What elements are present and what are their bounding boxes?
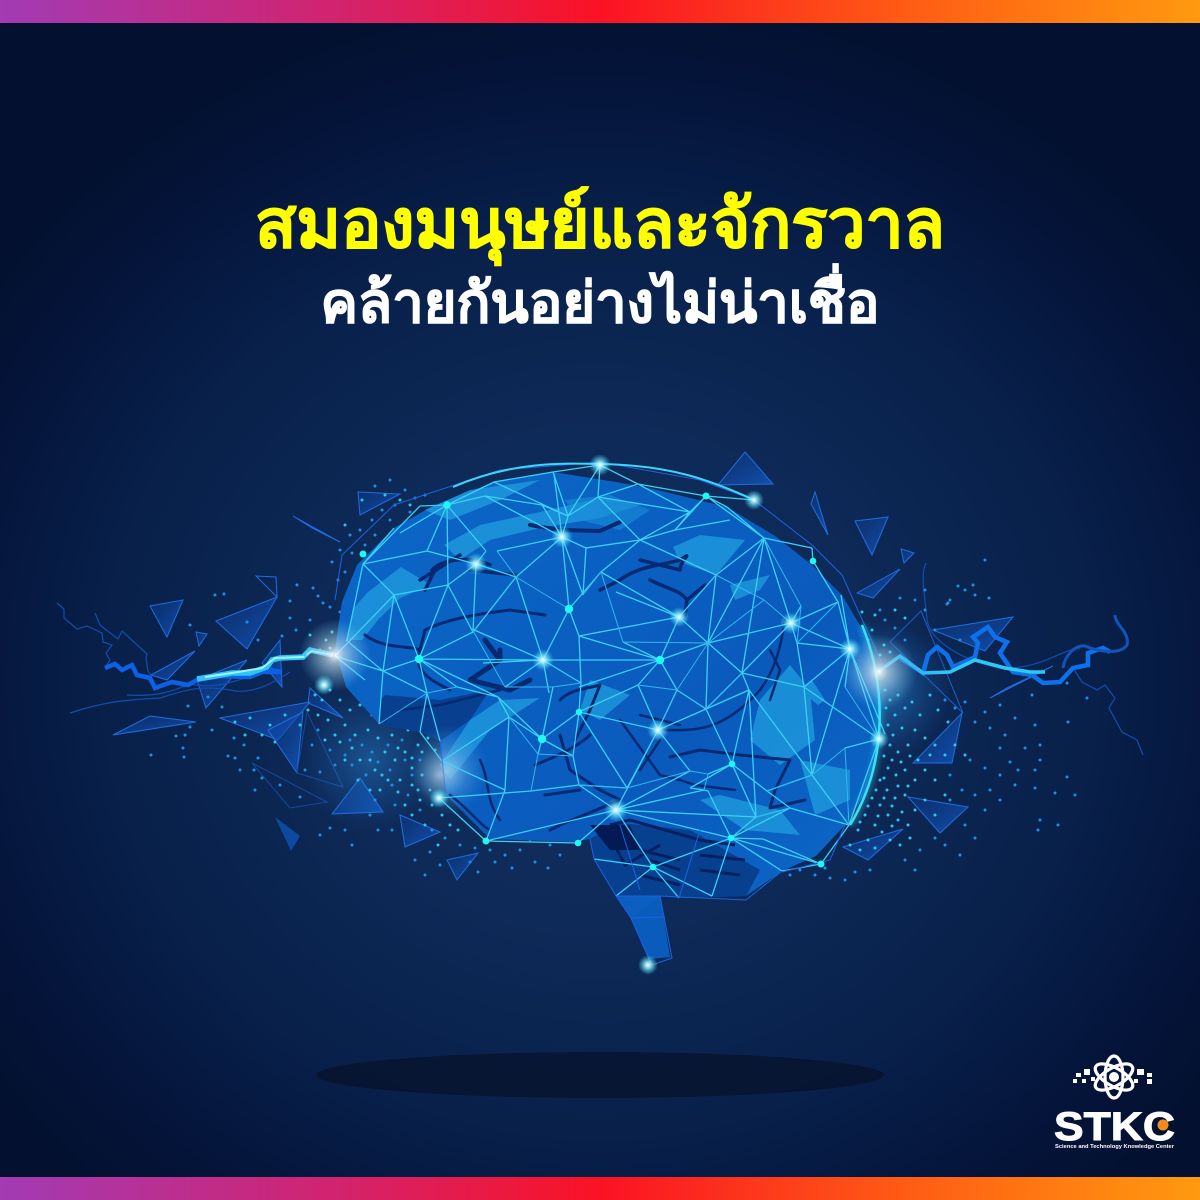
left debris triangles	[113, 492, 478, 880]
extra mesh facets	[379, 538, 879, 825]
floor shadow	[316, 1052, 884, 1098]
top rim arc	[453, 464, 752, 499]
right lightning bolt	[878, 615, 1127, 683]
left lightning bolt	[105, 650, 333, 688]
thin lightning strands	[57, 563, 1143, 755]
logo wordmark: STKC	[1054, 1105, 1175, 1149]
soft blue halos at flares	[300, 620, 950, 830]
logo atom icon	[1091, 1056, 1137, 1098]
top gradient bar	[0, 0, 1200, 23]
brain stem	[631, 896, 670, 959]
solid cyan network nodes	[360, 492, 824, 870]
polygon mesh lines	[335, 465, 885, 898]
logo pixel squares	[1073, 1069, 1152, 1084]
sulci	[365, 522, 805, 830]
logo orange dot	[1158, 1120, 1168, 1130]
right rim arc	[850, 625, 880, 825]
lower left light	[408, 725, 488, 815]
right debris triangles	[718, 452, 1053, 860]
cerebellum sulci	[610, 820, 745, 885]
large flare glows	[299, 619, 917, 801]
brain	[335, 462, 885, 965]
gyri highlights	[346, 480, 850, 835]
lower dark shadow	[379, 690, 490, 741]
bottom gradient bar	[0, 1177, 1200, 1200]
brain base	[335, 472, 882, 959]
logo tagline: Science and Technology Knowledge Center	[1055, 1144, 1175, 1150]
darker mesh lines	[335, 462, 885, 965]
particles blue	[151, 480, 1087, 880]
subtitle: คล้ายกันอย่างไม่น่าเชื่อ	[320, 271, 880, 334]
logo: STKC	[1054, 1056, 1175, 1150]
glowing white nodes	[314, 454, 889, 975]
right rim soft glow	[850, 625, 880, 825]
cerebellum and stem shading	[590, 823, 760, 898]
title: สมองมนุษย์และจักรวาล	[255, 187, 945, 262]
